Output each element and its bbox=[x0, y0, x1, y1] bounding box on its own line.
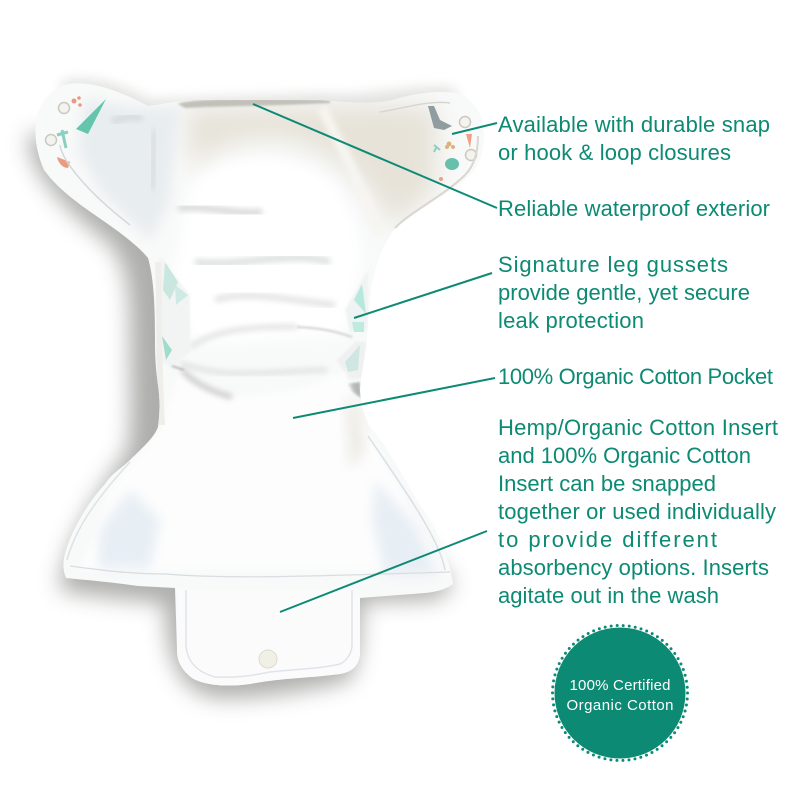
faint top glow shadow bbox=[60, 79, 460, 120]
right tab snaps bbox=[460, 116, 476, 160]
bottom hem stitching bbox=[70, 566, 450, 577]
white pocket mass bbox=[170, 158, 361, 345]
right tab print bbox=[428, 106, 472, 181]
badge: certified organic cotton: 100% Certified bbox=[570, 677, 670, 694]
callout: cotton pocket: 100% Organic Cotton Pocket bbox=[498, 364, 773, 389]
leg gusset prints bbox=[162, 262, 366, 372]
white fold on wing bbox=[320, 109, 360, 180]
callout: waterproof exterior: Reliable waterproof exterior bbox=[498, 196, 770, 221]
badge: certified organic cotton bbox=[552, 626, 688, 760]
fold shadows bbox=[178, 207, 262, 213]
pale blue left wing bbox=[80, 102, 176, 234]
wing crease bbox=[112, 117, 142, 122]
callout: closures: Available with durable snap bbox=[498, 112, 770, 137]
callout: inserts: and 100% Organic Cotton bbox=[498, 443, 751, 468]
soft drop shadow bbox=[28, 130, 452, 698]
callout: leg gussets: Signature leg gussets bbox=[498, 252, 728, 277]
callout: inserts: to provide different bbox=[498, 527, 717, 552]
badge: certified organic cotton: Organic Cotton bbox=[566, 697, 674, 714]
insert flap bbox=[177, 588, 360, 686]
gusset backing bbox=[169, 278, 190, 340]
callout: leg gussets bbox=[498, 252, 750, 333]
callout: inserts bbox=[498, 415, 778, 608]
callout: inserts: together or used individually bbox=[498, 499, 776, 524]
gusset dark gap bbox=[347, 382, 361, 398]
waterproof exterior, cream inner wing bbox=[185, 104, 438, 228]
diaper body bbox=[35, 83, 484, 686]
elastic band at waist bbox=[178, 99, 330, 108]
insert flap snap bbox=[259, 650, 277, 668]
callout: inserts: Insert can be snapped bbox=[498, 471, 716, 496]
tab stitching bbox=[60, 145, 130, 225]
callout: leg gussets: leak protection bbox=[498, 308, 644, 333]
fabric shading bbox=[78, 99, 440, 575]
callout: closures bbox=[498, 112, 770, 165]
leader lines bbox=[253, 104, 497, 612]
left tab print bbox=[57, 96, 106, 168]
callout: closures: or hook & loop closures bbox=[498, 140, 731, 165]
leg binding bbox=[158, 262, 162, 425]
diaper photo illustration bbox=[28, 79, 484, 698]
left tab snaps bbox=[46, 102, 70, 146]
callout: inserts: absorbency options. Inserts bbox=[498, 555, 769, 580]
callout: leg gussets: provide gentle, yet secure bbox=[498, 280, 750, 305]
pocket edge shadow bbox=[182, 370, 232, 397]
pocket lower panel bbox=[346, 382, 356, 394]
callout: inserts: agitate out in the wash bbox=[498, 583, 719, 608]
callout: inserts: Hemp/Organic Cotton Insert bbox=[498, 415, 778, 440]
